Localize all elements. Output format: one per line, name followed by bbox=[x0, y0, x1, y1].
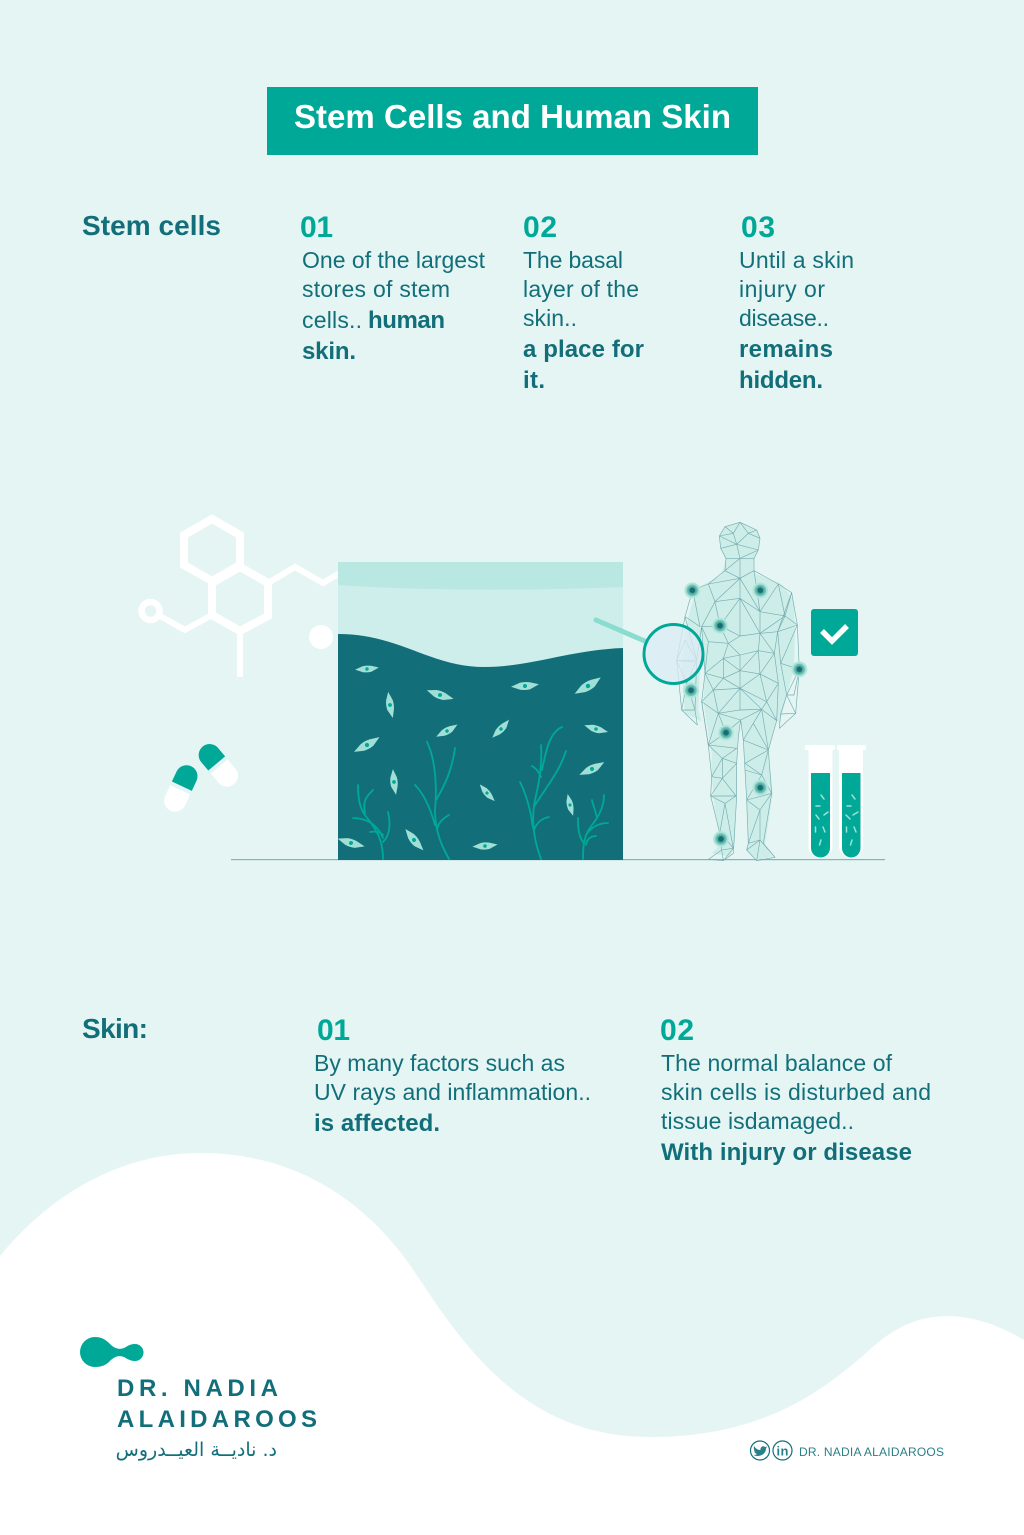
skin top layer bbox=[338, 562, 623, 672]
logo name: DR. NADIA bbox=[117, 1375, 278, 1402]
skin item 01: UV rays and inflammation.. bbox=[314, 1079, 591, 1105]
icon: capsules bbox=[160, 740, 242, 815]
icon: check mark badge bbox=[811, 609, 858, 656]
stem cells item 03 bbox=[739, 211, 854, 394]
stem cells item 01: skin. bbox=[302, 338, 356, 365]
stem cells item 01 bbox=[300, 211, 486, 365]
body pressure points bbox=[683, 582, 807, 847]
white wave background bbox=[0, 1153, 1024, 1535]
icon: twitter bbox=[750, 1441, 770, 1460]
stem cells item 03: Until a skin bbox=[739, 247, 854, 273]
icon: linkedin bbox=[773, 1441, 792, 1460]
icon: molecule bbox=[142, 519, 340, 677]
skin item 02: tissue isdamaged.. bbox=[661, 1108, 854, 1134]
footer social handle bbox=[750, 1441, 944, 1460]
skin item 01: 01 bbox=[317, 1014, 350, 1047]
plants bbox=[353, 727, 608, 859]
stem cells item 01: human bbox=[368, 307, 445, 334]
skin item 01: By many factors such as bbox=[314, 1050, 565, 1076]
stem cells item 02: it. bbox=[523, 367, 545, 394]
skin item 02: 02 bbox=[660, 1014, 694, 1047]
stem cells bbox=[336, 665, 609, 853]
stem cells item 02: skin.. bbox=[523, 305, 577, 331]
skin item 02: With injury or disease bbox=[661, 1139, 912, 1166]
heading: skin: Skin: bbox=[82, 1013, 148, 1044]
stem cells item 03: 03 bbox=[741, 211, 775, 244]
skin item 02 bbox=[660, 1014, 931, 1166]
heading: stem cells: Stem cells bbox=[82, 210, 221, 241]
icon: human body mesh bbox=[677, 522, 807, 861]
stem cells item 02 bbox=[523, 211, 644, 394]
stem cells item 03: disease.. bbox=[739, 305, 829, 331]
icon: test tubes bbox=[805, 745, 866, 858]
stem cells item 02: The basal bbox=[523, 247, 623, 273]
stem cells item 03: injury or bbox=[739, 276, 825, 302]
ground line bbox=[231, 859, 885, 860]
stem cells item 02: a place for bbox=[523, 336, 644, 363]
stem cells item 01: stores of stem bbox=[302, 276, 450, 302]
skin item 01 bbox=[314, 1014, 591, 1137]
icon: linkedin: in bbox=[776, 1444, 789, 1458]
logo mark bbox=[80, 1337, 144, 1367]
logo arabic name: د. ناديــة العيــدروس bbox=[116, 1439, 277, 1461]
icon: magnifying glass bbox=[596, 620, 703, 684]
skin cross-section block bbox=[336, 562, 623, 860]
logo bbox=[80, 1337, 317, 1461]
title banner bbox=[267, 87, 758, 155]
logo: ALAIDAROOS bbox=[117, 1406, 317, 1433]
skin item 01: is affected. bbox=[314, 1110, 440, 1137]
stem cells item 03: remains bbox=[739, 336, 833, 363]
stem cells item 02: layer of the bbox=[523, 276, 639, 302]
skin surface band bbox=[338, 562, 623, 590]
stem cells item 03: hidden. bbox=[739, 367, 823, 394]
stem cells item 02: 02 bbox=[523, 211, 557, 244]
skin item 02: skin cells is disturbed and bbox=[661, 1079, 931, 1105]
footer social handle: DR. NADIA ALAIDAROOS bbox=[799, 1445, 944, 1459]
stem cells item 01: One of the largest bbox=[302, 247, 486, 273]
skin dermis bbox=[338, 634, 623, 860]
skin item 02: The normal balance of bbox=[661, 1050, 893, 1076]
title banner: Stem Cells and Human Skin bbox=[294, 98, 731, 135]
stem cells item 01: 01 bbox=[300, 211, 333, 244]
stem cells item 01: cells.. bbox=[302, 307, 362, 333]
